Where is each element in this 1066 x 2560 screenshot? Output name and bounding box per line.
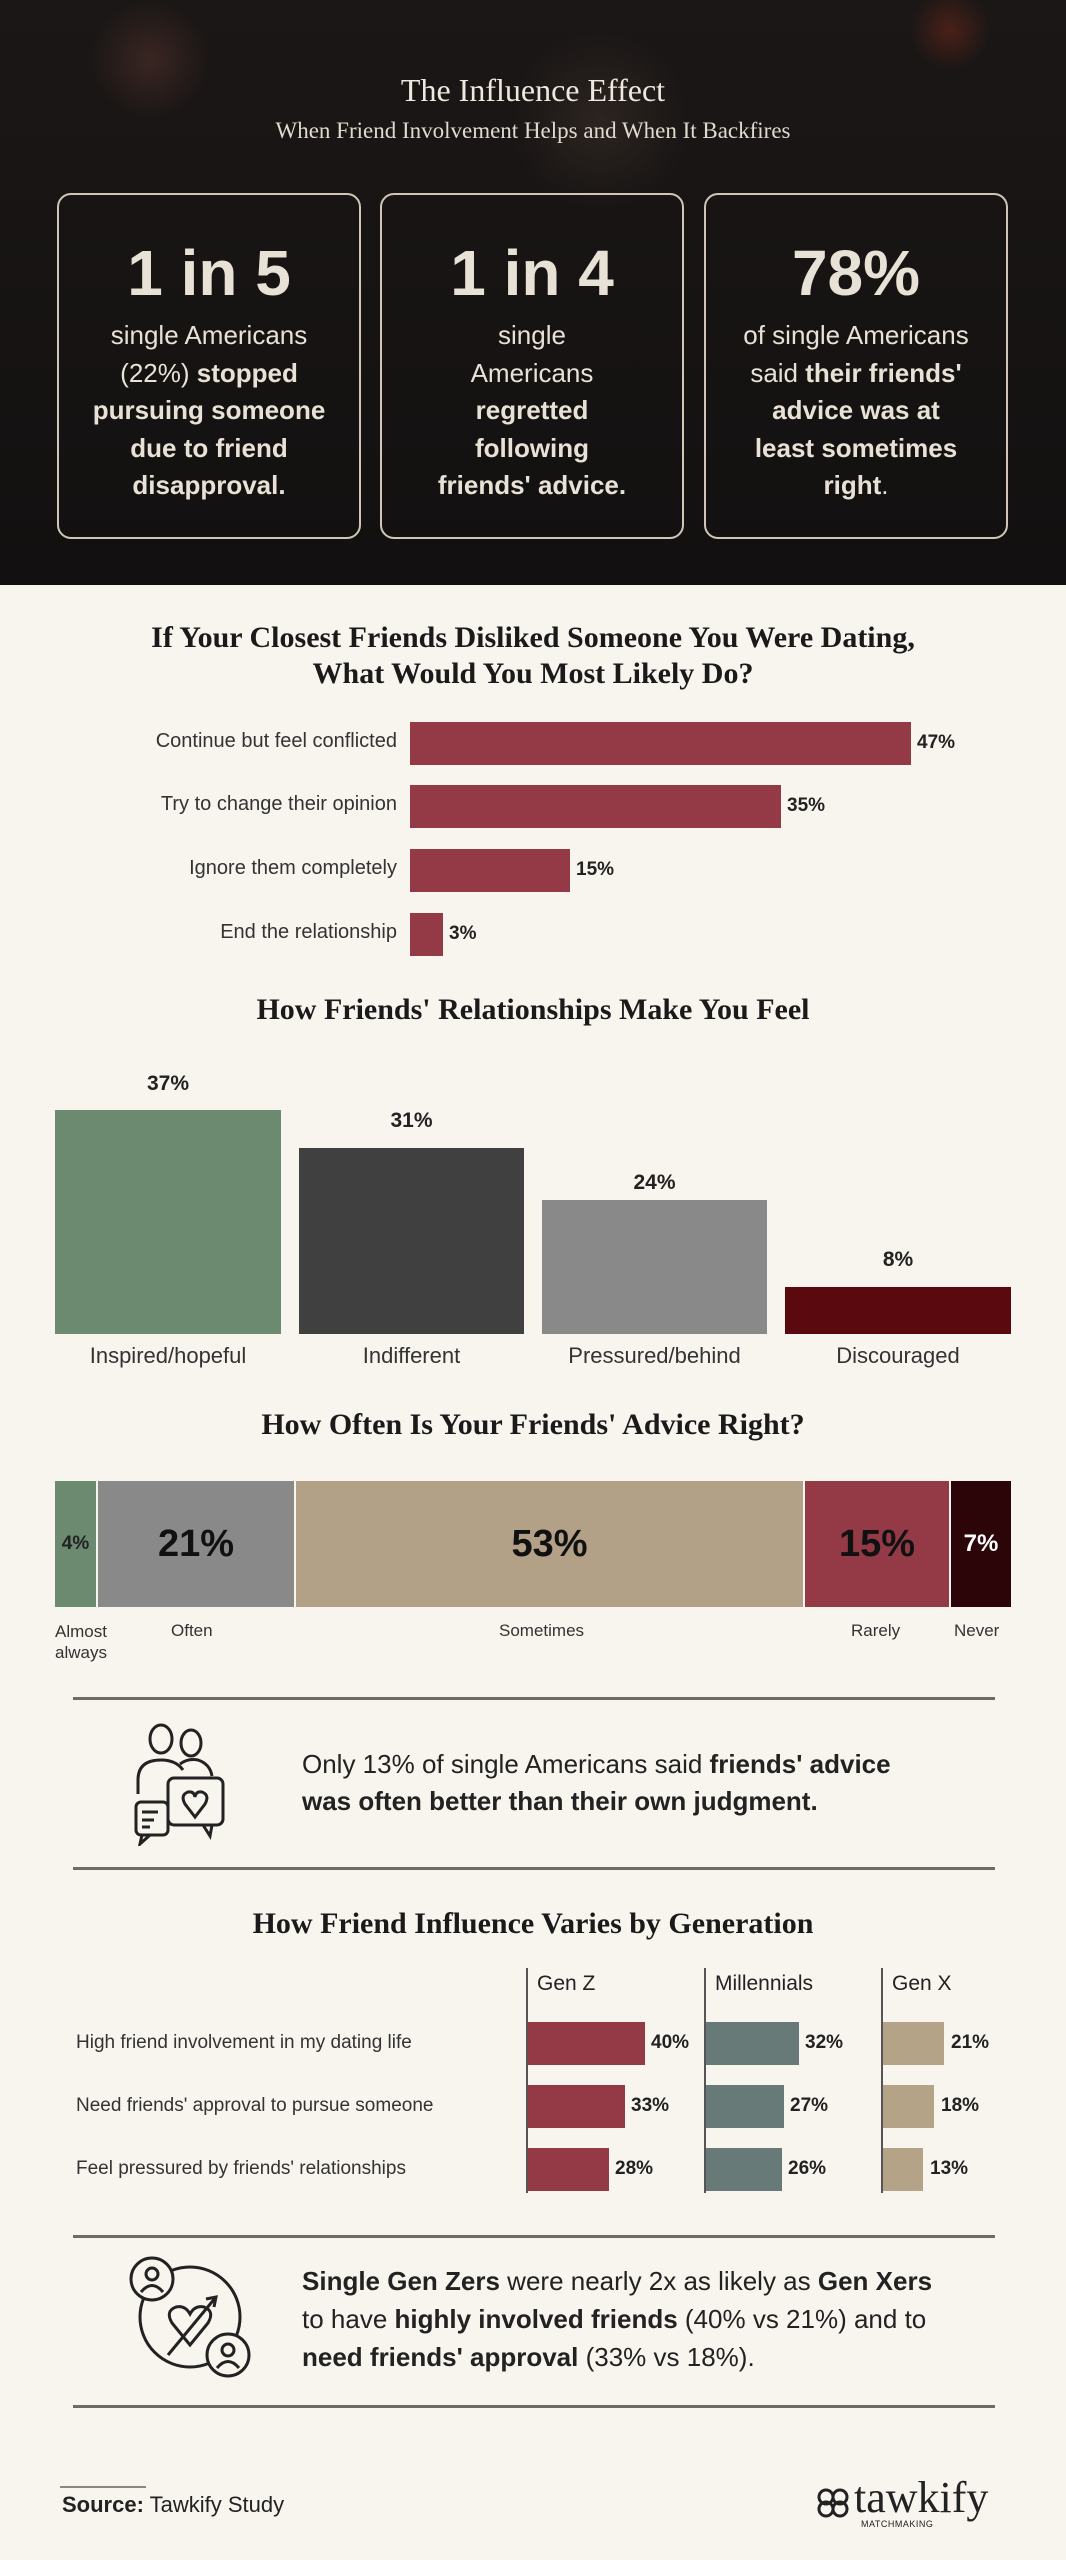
stacked bar: advice: Sometimes [499, 1621, 584, 1640]
column chart: feel: 8% [883, 1248, 913, 1271]
column chart: feel: Pressured/behind [568, 1343, 741, 1368]
stacked bar: advice: always [55, 1643, 107, 1662]
stat box 2: single [498, 320, 566, 350]
column chart: feel: 37% [147, 1072, 189, 1095]
stat box 3: least sometimes [755, 432, 957, 462]
stacked bar: advice: Never [954, 1621, 999, 1640]
callout: gen z: to have highly involved friends (40% vs 21%) and to [302, 2304, 926, 2334]
generation chart [76, 1968, 989, 2193]
generation chart: Millennials [715, 1972, 813, 1995]
stat box 3: said their friends' [750, 358, 962, 388]
stat box 1: disapproval. [132, 470, 286, 500]
stat box 1: due to friend [130, 432, 288, 462]
row 1: Continue but feel conflicted [156, 730, 397, 752]
logo: tawkify [854, 2473, 988, 2522]
subtitle: When Friend Involvement Helps and When It Backfires [275, 118, 790, 143]
logo [818, 2473, 988, 2529]
generation chart: Feel pressured by friends' relationships [76, 2158, 406, 2179]
column chart: feel: Indifferent [363, 1343, 460, 1368]
generation chart: 21% [951, 2032, 989, 2053]
generation chart: High friend involvement in my dating life [76, 2032, 412, 2053]
header background [0, 0, 1066, 585]
bar chart: disliked: 47% [917, 732, 955, 753]
source: Source: Tawkify Study [62, 2492, 284, 2517]
generation chart: Gen Z [537, 1972, 595, 1995]
stat box 3 [704, 193, 1008, 539]
stacked bar: advice: 53% [511, 1522, 588, 1564]
title: The Influence Effect [401, 72, 665, 108]
stacked bar: advice: Rarely [851, 1621, 900, 1640]
bar chart: disliked: 35% [787, 795, 825, 816]
generation chart: 13% [930, 2158, 968, 2179]
stat box 1 [57, 193, 361, 539]
logo: MATCHMAKING [861, 2519, 933, 2529]
stacked bar: advice [55, 1481, 1011, 1662]
row 4: End the relationship [220, 921, 397, 943]
column chart: feel: Discouraged [836, 1343, 960, 1368]
stacked bar: advice: 21% [158, 1522, 234, 1564]
heading: disliked: If Your Closest Friends Disliked Someone You Were Dating, [151, 621, 915, 654]
stat box 1: 1 in 5 [127, 237, 291, 309]
stat box 2: 1 in 4 [450, 237, 614, 309]
generation chart: 33% [631, 2095, 669, 2116]
bar chart: disliked [156, 722, 955, 956]
column chart: feel: 31% [390, 1109, 433, 1132]
column chart: feel [55, 1072, 1011, 1368]
bar chart: disliked: 3% [449, 923, 476, 944]
stacked bar: advice: 4% [62, 1533, 89, 1554]
stat box 3: advice was at [772, 395, 940, 425]
heading: disliked [151, 621, 915, 690]
callout: gen z [302, 2266, 932, 2372]
stacked bar: advice: Almost [55, 1622, 107, 1641]
stat box 3: right. [824, 470, 888, 500]
generation chart: 32% [805, 2032, 843, 2053]
generation chart: 26% [788, 2158, 826, 2179]
stat box 1: single Americans [111, 320, 307, 350]
stat box 1: (22%) stopped [120, 358, 298, 388]
stacked bar: advice: 15% [839, 1522, 915, 1564]
generation chart: 40% [651, 2032, 689, 2053]
stacked bar: advice: Often [171, 1621, 213, 1640]
bar chart: disliked: 15% [576, 859, 614, 880]
generation chart: Gen X [892, 1972, 952, 1995]
row 2: Try to change their opinion [161, 793, 397, 815]
generation chart: 28% [615, 2158, 653, 2179]
generation chart: 27% [790, 2095, 828, 2116]
callout: advice [302, 1749, 891, 1816]
stat box 1: pursuing someone [93, 395, 325, 425]
callout: gen z: Single Gen Zers were nearly 2x as likely as Gen Xers [302, 2266, 932, 2296]
stat box 3: of single Americans [743, 320, 969, 350]
callout: gen z: need friends' approval (33% vs 18%). [302, 2342, 755, 2372]
stacked bar: advice: 7% [964, 1530, 998, 1557]
stat box 2: regretted [476, 395, 588, 425]
icon: couple heart arrow [130, 2256, 250, 2378]
heading: advice right: How Often Is Your Friends' Advice Right? [261, 1408, 805, 1441]
heading: generation: How Friend Influence Varies by Generation [253, 1907, 813, 1940]
stat box 2: following [475, 432, 589, 462]
generation chart: Need friends' approval to pursue someone [76, 2095, 433, 2116]
heading: feel: How Friends' Relationships Make You Feel [256, 993, 810, 1026]
stat box 2 [380, 193, 684, 539]
generation chart: 18% [941, 2095, 979, 2116]
column chart: feel: 24% [633, 1171, 676, 1194]
column chart: feel: Inspired/hopeful [90, 1343, 246, 1368]
callout: advice: was often better than their own judgment. [302, 1786, 818, 1816]
icon: friends chat heart [134, 1724, 224, 1846]
stat box 2: friends' advice. [438, 470, 626, 500]
heading: disliked: What Would You Most Likely Do? [313, 657, 753, 690]
callout: advice: Only 13% of single Americans said friends' advice [302, 1749, 891, 1779]
stat box 3: 78% [792, 237, 920, 309]
row 3: Ignore them completely [189, 857, 397, 879]
stat box 2: Americans [471, 358, 593, 388]
